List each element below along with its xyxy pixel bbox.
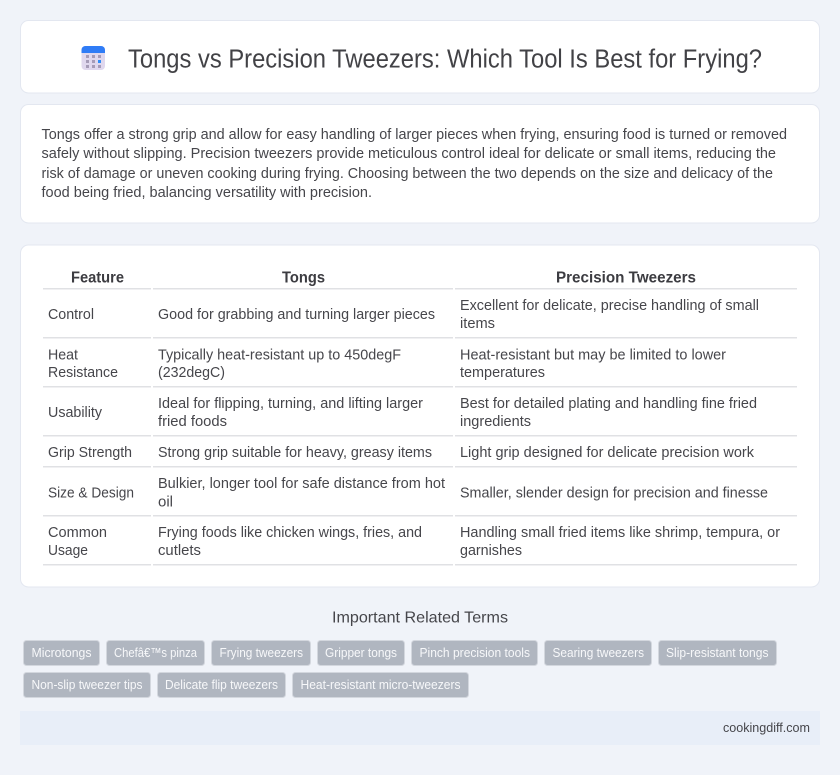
related term tags: Frying tweezers bbox=[220, 645, 303, 660]
row: size and design bbox=[48, 476, 768, 510]
row: control: Excellent for delicate, precise handling of small bbox=[460, 298, 759, 314]
row: heat resistance bbox=[48, 348, 726, 381]
row: control: items bbox=[460, 316, 495, 332]
row: usability: Ideal for flipping, turning, and lifting larger bbox=[158, 396, 423, 412]
title: Tongs vs Precision Tweezers: Which Tool Is Best for Frying? bbox=[128, 46, 762, 74]
row: control: Good for grabbing and turning larger pieces bbox=[158, 307, 435, 323]
table header: Precision Tweezers bbox=[556, 270, 696, 286]
row: usability: Best for detailed plating and handling fine fried bbox=[460, 396, 757, 412]
intro text: safely without slipping. Precision tweezers provide meticulous control ideal for delicate or small items, reducing the bbox=[42, 146, 776, 162]
row: usability: fried foods bbox=[158, 414, 227, 430]
footer source: cookingdiff.com bbox=[723, 720, 810, 735]
row: size and design: Bulkier, longer tool for safe distance from hot bbox=[158, 476, 445, 492]
related term tags: Non-slip tweezer tips bbox=[32, 677, 143, 692]
intro text: Tongs offer a strong grip and allow for easy handling of larger pieces when frying, ensuring food is turned or removed bbox=[42, 127, 787, 143]
row: grip strength: Light grip designed for delicate precision work bbox=[460, 445, 755, 461]
row: common usage: Handling small fried items like shrimp, tempura, or bbox=[460, 525, 780, 541]
row: grip strength: Grip Strength bbox=[48, 445, 132, 461]
related term tags: Heat-resistant micro-tweezers bbox=[300, 677, 461, 692]
row: heat resistance: temperatures bbox=[460, 365, 545, 381]
heading: important related terms: Important Related Terms bbox=[332, 610, 508, 626]
row: usability: Usability bbox=[48, 405, 103, 421]
row: heat resistance: Typically heat-resistant up to 450degF bbox=[158, 348, 401, 364]
table header bbox=[71, 270, 696, 286]
table header: Tongs bbox=[282, 270, 325, 286]
row: size and design: oil bbox=[158, 494, 173, 510]
row: common usage: cutlets bbox=[158, 543, 201, 559]
row: heat resistance: (232degC) bbox=[158, 365, 225, 381]
panel: comparison table bbox=[20, 245, 820, 587]
row: control bbox=[48, 298, 759, 332]
row: common usage: garnishes bbox=[460, 543, 522, 559]
row: heat resistance: Resistance bbox=[48, 365, 118, 381]
row: common usage: Common bbox=[48, 525, 107, 541]
related term tags: Chefâ€™s pinza bbox=[114, 645, 198, 660]
related term tags: Searing tweezers bbox=[552, 645, 644, 660]
row: control: Control bbox=[48, 307, 94, 323]
row: grip strength bbox=[48, 445, 755, 461]
related term tags: Microtongs bbox=[32, 645, 92, 660]
row: heat resistance: Heat-resistant but may be limited to lower bbox=[460, 348, 726, 364]
panel: header bbox=[20, 20, 820, 93]
intro text bbox=[42, 127, 787, 201]
related term tags: Slip-resistant tongs bbox=[666, 645, 769, 660]
related term tags: Delicate flip tweezers bbox=[165, 677, 278, 692]
related term tags: Pinch precision tools bbox=[420, 645, 530, 660]
footer bar bbox=[20, 711, 820, 745]
row: size and design: Size & Design bbox=[48, 486, 134, 502]
row: size and design: Smaller, slender design for precision and finesse bbox=[460, 486, 768, 502]
row: common usage bbox=[48, 525, 780, 559]
row: heat resistance: Heat bbox=[48, 348, 78, 364]
intro text: risk of damage or uneven cooking during frying. Choosing between the two depends on the size and delicacy of the bbox=[42, 166, 773, 182]
intro text: food being fried, balancing versatility with precision. bbox=[42, 185, 372, 201]
related term tags bbox=[24, 640, 776, 698]
row: common usage: Usage bbox=[48, 543, 88, 559]
row: grip strength: Strong grip suitable for heavy, greasy items bbox=[158, 445, 432, 461]
row: common usage: Frying foods like chicken wings, fries, and bbox=[158, 525, 422, 541]
icon: calendar bbox=[82, 46, 105, 70]
table header: Feature bbox=[71, 270, 124, 286]
row: usability: ingredients bbox=[460, 414, 531, 430]
row: usability bbox=[48, 396, 757, 430]
related term tags: Gripper tongs bbox=[325, 645, 397, 660]
panel: introduction bbox=[20, 104, 820, 223]
